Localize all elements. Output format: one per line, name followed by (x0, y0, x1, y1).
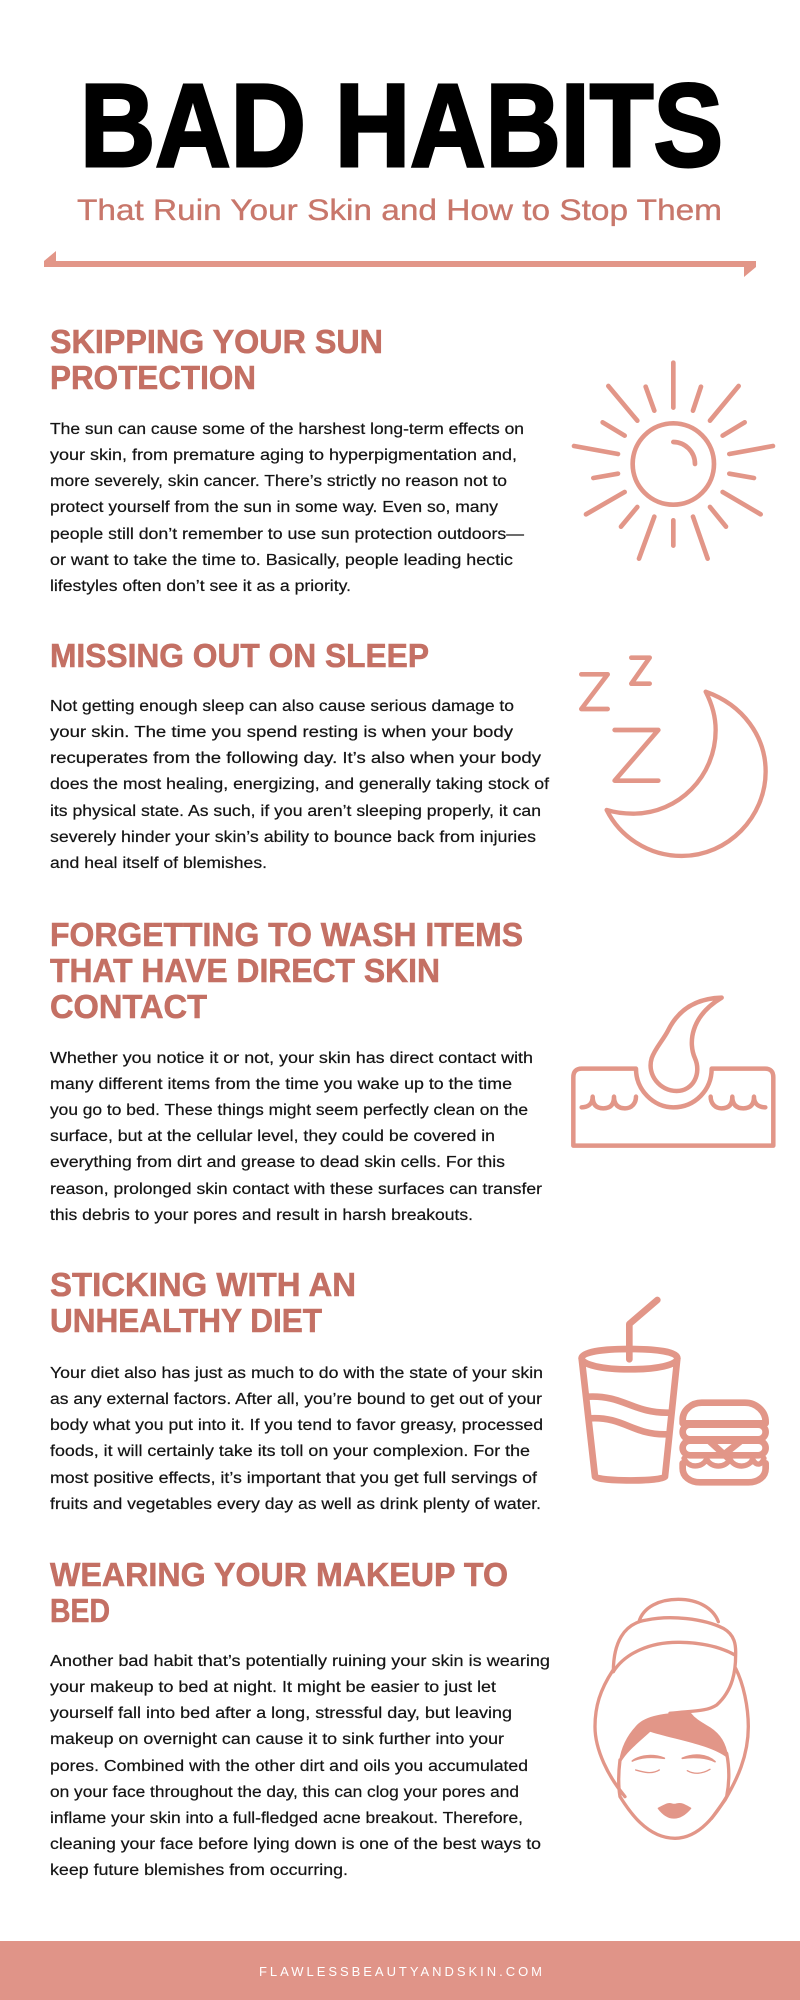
panel: missing out on sleep (50, 638, 766, 872)
body text: Whether you notice it or not, your skin has direct contact with (50, 1050, 533, 1067)
heading: BED (50, 1593, 110, 1630)
panel: unhealthy diet (50, 1267, 766, 1513)
heading: MISSING OUT ON SLEEP (50, 638, 429, 675)
body text: lifestyles often don’t see it as a priority. (50, 578, 351, 595)
body text (50, 698, 550, 872)
body text: body what you put into it. If you tend to favor greasy, processed (50, 1417, 543, 1434)
heading: UNHEALTHY DIET (50, 1303, 322, 1340)
body text: and heal itself of blemishes. (50, 855, 267, 872)
body text: makeup on overnight can cause it to sink further into your (50, 1731, 504, 1748)
heading (50, 917, 523, 1026)
heading: PROTECTION (50, 360, 256, 397)
panel: skipping sun protection (50, 324, 773, 595)
body text: surface, but at the cellular level, they could be covered in (50, 1128, 495, 1145)
icon: skin pore with droplet (573, 998, 773, 1146)
heading (50, 1267, 356, 1340)
body text: this debris to your pores and result in harsh breakouts. (50, 1207, 473, 1224)
body text: or want to take the time to. Basically, people leading hectic (50, 552, 513, 569)
body text (50, 421, 525, 595)
heading (50, 1557, 508, 1630)
body text: your makeup to bed at night. It might be easier to just let (50, 1679, 497, 1696)
body text: Another bad habit that’s potentially ruining your skin is wearing (50, 1653, 550, 1670)
body text: its physical state. As such, if you aren’t sleeping properly, it can (50, 803, 541, 820)
title: BAD HABITS (80, 60, 723, 192)
body text: pores. Combined with the other dirt and oils you accumulated (50, 1758, 528, 1775)
body text: inflame your skin into a full-fledged acne breakout. Therefore, (50, 1810, 523, 1827)
body text (50, 1050, 542, 1224)
body text: cleaning your face before lying down is one of the best ways to (50, 1836, 541, 1853)
body text: severely hinder your skin’s ability to bounce back from injuries (50, 829, 536, 846)
body text: reason, prolonged skin contact with these surfaces can transfer (50, 1181, 542, 1198)
body text: recuperates from the following day. It’s also when your body (50, 750, 541, 767)
body text: fruits and vegetables every day as well as drink plenty of water. (50, 1496, 541, 1513)
body text (50, 1365, 543, 1513)
heading: SKIPPING YOUR SUN (50, 324, 383, 361)
icon: moon and Z letters (581, 658, 766, 856)
panel: wearing makeup to bed (50, 1557, 748, 1879)
heading: STICKING WITH AN (50, 1267, 356, 1304)
icon: drink and burger (582, 1300, 766, 1482)
body text: most positive effects, it’s important that you get full servings of (50, 1470, 538, 1487)
body text: your skin, from premature aging to hyperpigmentation and, (50, 447, 517, 464)
body text: yourself fall into bed after a long, stressful day, but leaving (50, 1705, 512, 1722)
subtitle: That Ruin Your Skin and How to Stop Them (77, 194, 722, 227)
body text: Your diet also has just as much to do with the state of your skin (50, 1365, 543, 1382)
body text: everything from dirt and grease to dead skin cells. For this (50, 1154, 505, 1171)
panel: forgetting to wash items (50, 917, 773, 1224)
body text: The sun can cause some of the harshest long-term effects on (50, 421, 524, 438)
footer (0, 1941, 800, 2000)
body text: you go to bed. These things might seem perfectly clean on the (50, 1102, 528, 1119)
body text: people still don’t remember to use sun protection outdoors— (50, 526, 525, 543)
header rule with folded ends (44, 251, 756, 277)
icon: sun (574, 363, 773, 559)
body text (50, 1653, 550, 1879)
heading: WEARING YOUR MAKEUP TO (50, 1557, 508, 1594)
body text: Not getting enough sleep can also cause serious damage to (50, 698, 514, 715)
body text: protect yourself from the sun in some way. Even so, many (50, 499, 498, 516)
body text: many different items from the time you wake up to the time (50, 1076, 512, 1093)
heading: CONTACT (50, 989, 208, 1026)
body text: does the most healing, energizing, and generally taking stock of (50, 776, 550, 793)
heading: FORGETTING TO WASH ITEMS (50, 917, 523, 954)
body text: as any external factors. After all, you’re bound to get out of your (50, 1391, 542, 1408)
heading: THAT HAVE DIRECT SKIN (50, 953, 440, 990)
body text: more severely, skin cancer. There’s strictly no reason not to (50, 473, 507, 490)
body text: on your face throughout the day, this can clog your pores and (50, 1784, 519, 1801)
body text: your skin. The time you spend resting is when your body (50, 724, 513, 741)
heading (50, 324, 383, 397)
body text: foods, it will certainly take its toll on your complexion. For the (50, 1443, 530, 1460)
icon: face with towel (595, 1599, 748, 1838)
footer: FLAWLESSBEAUTYANDSKIN.COM (259, 1964, 542, 1979)
body text: keep future blemishes from occurring. (50, 1862, 348, 1879)
